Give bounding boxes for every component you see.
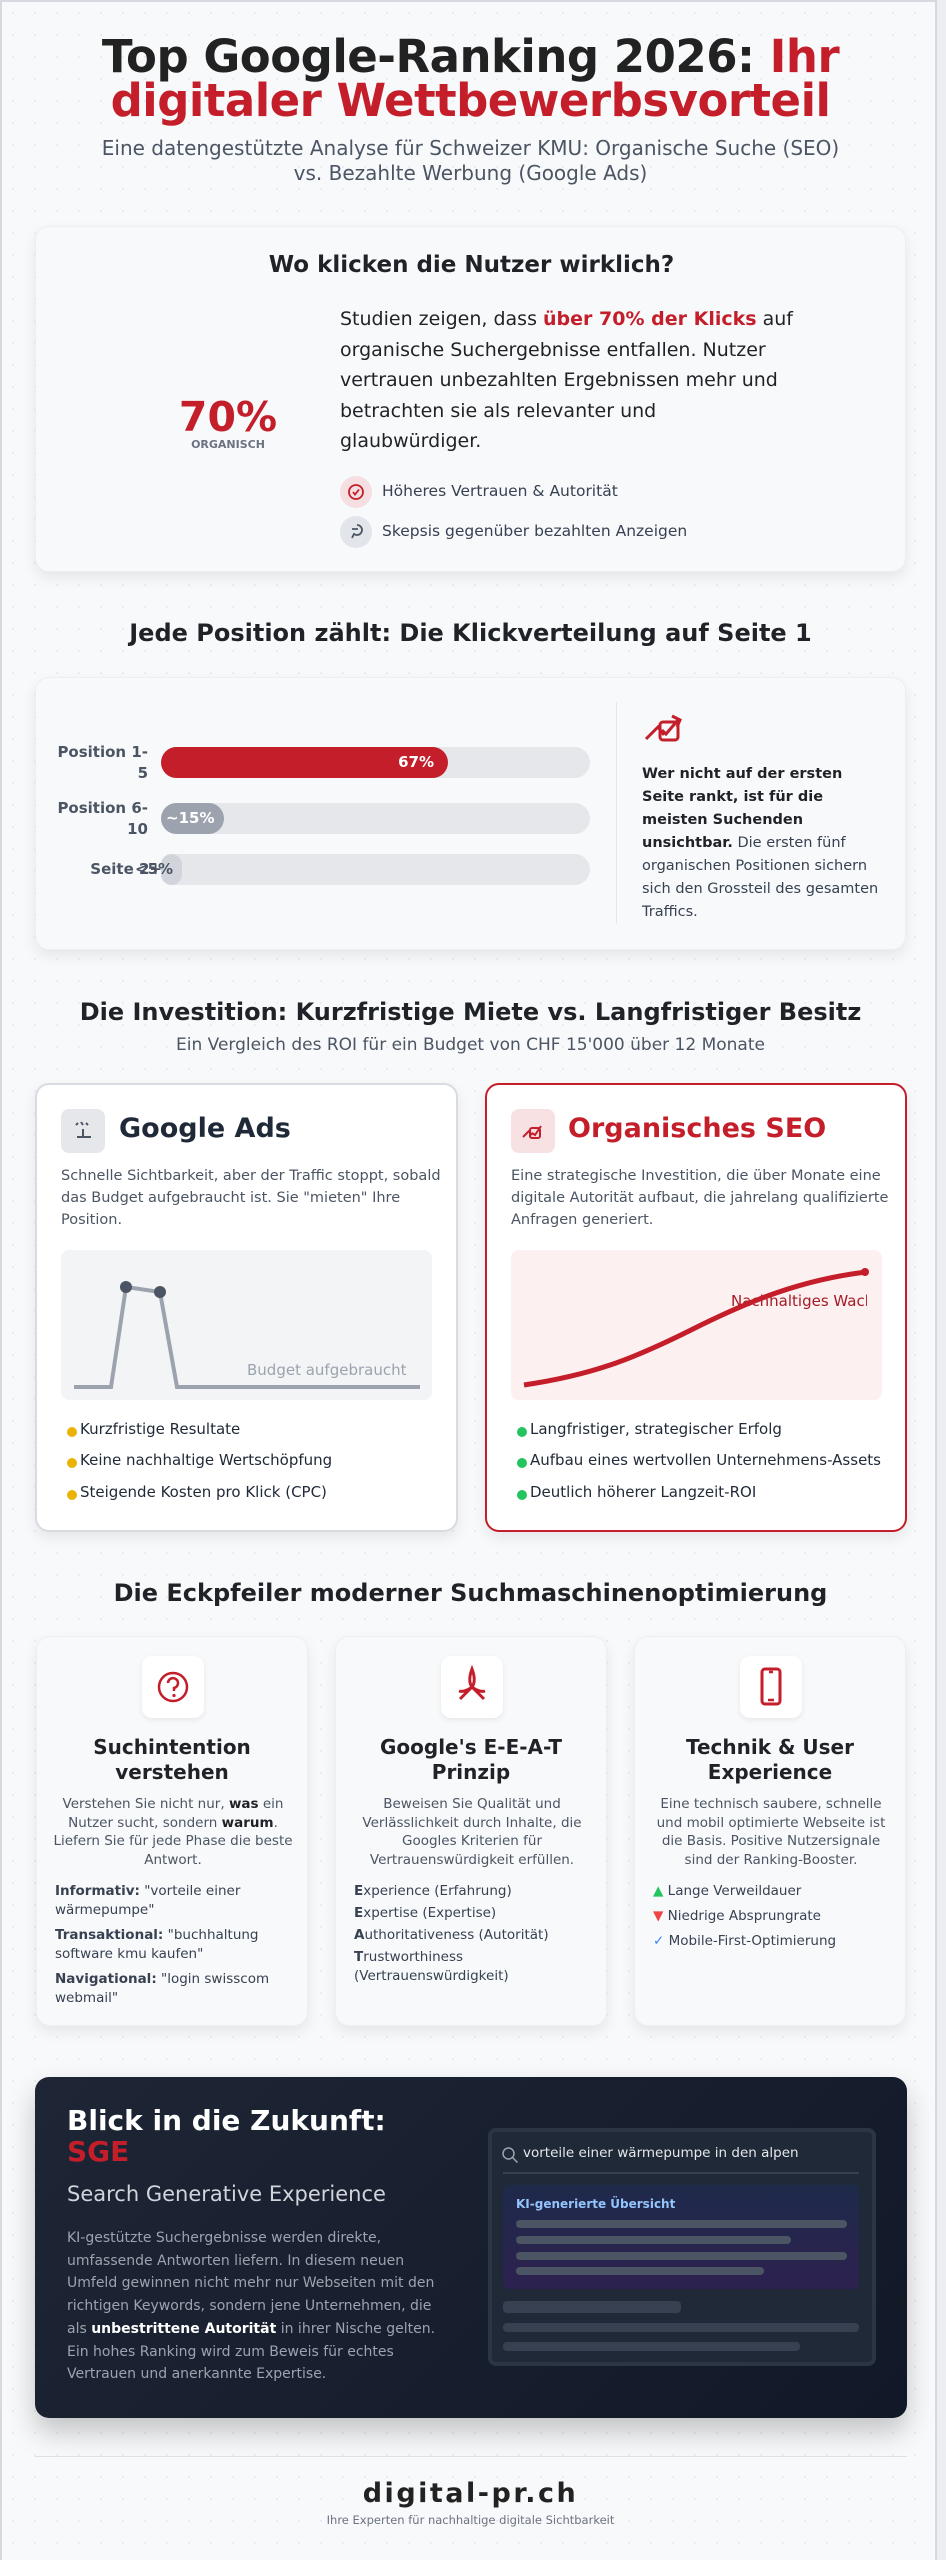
bar chart: 5 [138,764,148,782]
heading: Investition: Die Investition: Kurzfristige Miete vs. Langfristiger Besitz [80,998,861,1026]
heading: SGE: Blick in die Zukunft: [67,2104,386,2137]
mockup: search [488,2128,876,2366]
panel: EEAT: Authoritativeness (Autorität) [354,1927,549,1943]
icon: eeat [441,1656,503,1718]
panel: SEO [485,1083,907,1532]
panel: Suchintention: Transaktional: "buchhaltung software kmu kaufen" [55,1927,259,1962]
list: ▲ Lange Verweildauer [653,1883,801,1899]
panel: Google Ads [35,1083,458,1532]
panel: Technik [634,1636,906,2026]
text: Beweisen Sie Qualität und Verlässlichkeit durch Inhalte, die Googles Kriterien für Vertrauenswürdigkeit erfüllen. [362,1796,582,1868]
heading: Eckpfeiler: Die Eckpfeiler moderner Suchmaschinenoptimierung [114,1579,827,1607]
list: seo: Langfristiger, strategischer Erfolg [530,1420,782,1438]
search bar: vorteile einer wärmepumpe in den alpen [523,2145,799,2161]
icon: ads [61,1109,105,1153]
footer: Ihre Experten für nachhaltige digitale Sichtbarkeit [327,2513,614,2527]
icon: phone [740,1656,802,1718]
panel: bar chart [35,677,906,950]
stat: 70%: 70% [179,393,277,441]
stat: 70%: ORGANISCH [191,438,265,451]
heading: Organisches SEO [568,1113,826,1144]
panel: click share [35,226,906,572]
title: Top Google-Ranking 2026: Ihr [102,30,839,83]
footer: digital-pr.ch [363,2478,578,2509]
panel: Technik: ✓ Mobile-First-Optimierung [653,1933,836,1949]
subtitle: Eine datengestützte Analyse für Schweizer KMU: Organische Suche (SEO) [102,136,839,160]
title: Technik & User [686,1735,854,1759]
panel: SEO: Aufbau eines wertvollen Unternehmens-Assets [530,1451,881,1469]
panel: EEAT [335,1636,607,2026]
subheading: Search Generative Experience [67,2182,386,2206]
title: digitaler Wettbewerbsvorteil [111,74,830,127]
chart: seo growth [511,1250,882,1400]
bar chart: Position 1- [57,743,148,761]
text: Schnelle Sichtbarkeit, aber der Traffic stoppt, sobald das Budget aufgebraucht ist. Sie "mieten" Ihre Position. [61,1168,441,1228]
panel: EEAT: Expertise (Expertise) [354,1905,496,1921]
panel: Suchintention: Navigational: "login swisscom webmail" [55,1971,269,2006]
heading: Google Ads [119,1113,291,1144]
panel: EEAT: Trustworthiness (Vertrauenswürdigkeit) [354,1949,509,1984]
divider [616,702,617,924]
chart: ads spike [61,1250,432,1400]
bar chart: ~15% [166,809,214,827]
panel: Technik: ▼ Niedrige Absprungrate [653,1908,821,1924]
bar chart: Seite 2+ [90,860,162,878]
bar chart [57,743,590,885]
panel: Google Ads: Keine nachhaltige Wertschöpfung [80,1451,332,1469]
text: Verstehen Sie nicht nur, was ein Nutzer sucht, sondern warum. Liefern Sie für jede Phase die beste Antwort. [53,1796,293,1868]
panel: Google Ads: Steigende Kosten pro Klick (CPC) [80,1483,327,1501]
icon: seo [511,1109,555,1153]
item: trust: Höheres Vertrauen & Autorität [382,482,618,500]
heading: SGE [67,2104,386,2168]
title [380,1735,562,1784]
list: ads: Kurzfristige Resultate [80,1420,240,1438]
ai overview: KI-generierte Übersicht [516,2197,675,2211]
panel: SEO: Deutlich höherer Langzeit-ROI [530,1483,756,1501]
heading: Wo klicken: Wo klicken die Nutzer wirklich? [269,252,674,278]
icon: check [340,476,372,508]
title: verstehen [115,1760,229,1784]
bar chart: <5% [135,860,173,878]
subtitle [102,136,839,185]
text: KI-gestützte Suchergebnisse werden direkte, umfassende Antworten liefern. In diesem neuen Umfeld gewinnen nicht mehr nur Webseiten mit den richtigen Keywords, sondern jene Unternehmen, die als unbestrittene Autorität in ihrer Nische gelten. Ein hohes Ranking wird zum Beweis für echtes Vertrauen und anerkannte Expertise. [67,2230,435,2382]
panel: Suchintention [36,1636,308,2026]
footer [327,2478,614,2527]
item: trust [340,476,618,508]
bar chart: 67% [398,753,434,771]
title [102,30,840,127]
chart: ads spike: Budget aufgebraucht [247,1361,407,1379]
item: skepsis: Skepsis gegenüber bezahlten Anzeigen [382,522,687,540]
bar chart: Position 6- [57,799,148,817]
list: Experience (Erfahrung) [354,1883,512,1899]
icon: trend [645,714,682,742]
icon: question [142,1656,204,1718]
title: Google's E-E-A-T [380,1735,562,1759]
text block: Studien zeigen, dass über 70% der Klicks auf organische Suchergebnisse entfallen. Nutzer vertrauen unbezahlten Ergebnissen mehr und betrachten sie als relevanter und glaubwürdiger. [340,308,793,452]
title: Experience [708,1760,832,1784]
callout: unsichtbar: Wer nicht auf der ersten Seite rankt, ist für die meisten Suchenden unsichtbar. Die ersten fünf organischen Positionen sichern sich den Grossteil des gesamten Traffics. [642,766,878,920]
title: Prinzip [432,1760,510,1784]
item: skepsis [340,516,687,548]
heading: Klickverteilung: Jede Position zählt: Die Klickverteilung auf Seite 1 [129,619,812,647]
subheading: Ein Vergleich des ROI für ein Budget von CHF 15'000 über 12 Monate [176,1035,765,1055]
list: Informativ: "vorteile einer wärmepumpe" [55,1883,240,1918]
text: Eine strategische Investition, die über Monate eine digitale Autorität aufbaut, die jahrelang qualifizierte Anfragen generiert. [511,1168,888,1228]
ai overview [503,2185,859,2289]
title [93,1735,251,1784]
bar chart: 10 [127,820,148,838]
title [686,1735,854,1784]
panel: SGE [35,2077,907,2418]
icon: skepsis [340,516,372,548]
heading: SGE: SGE [67,2135,129,2168]
subtitle: vs. Bezahlte Werbung (Google Ads) [294,161,647,185]
title: Suchintention [93,1735,251,1759]
text: Eine technisch saubere, schnelle und mobil optimierte Webseite ist die Basis. Positive Nutzersignale sind der Ranking-Booster. [657,1796,885,1868]
